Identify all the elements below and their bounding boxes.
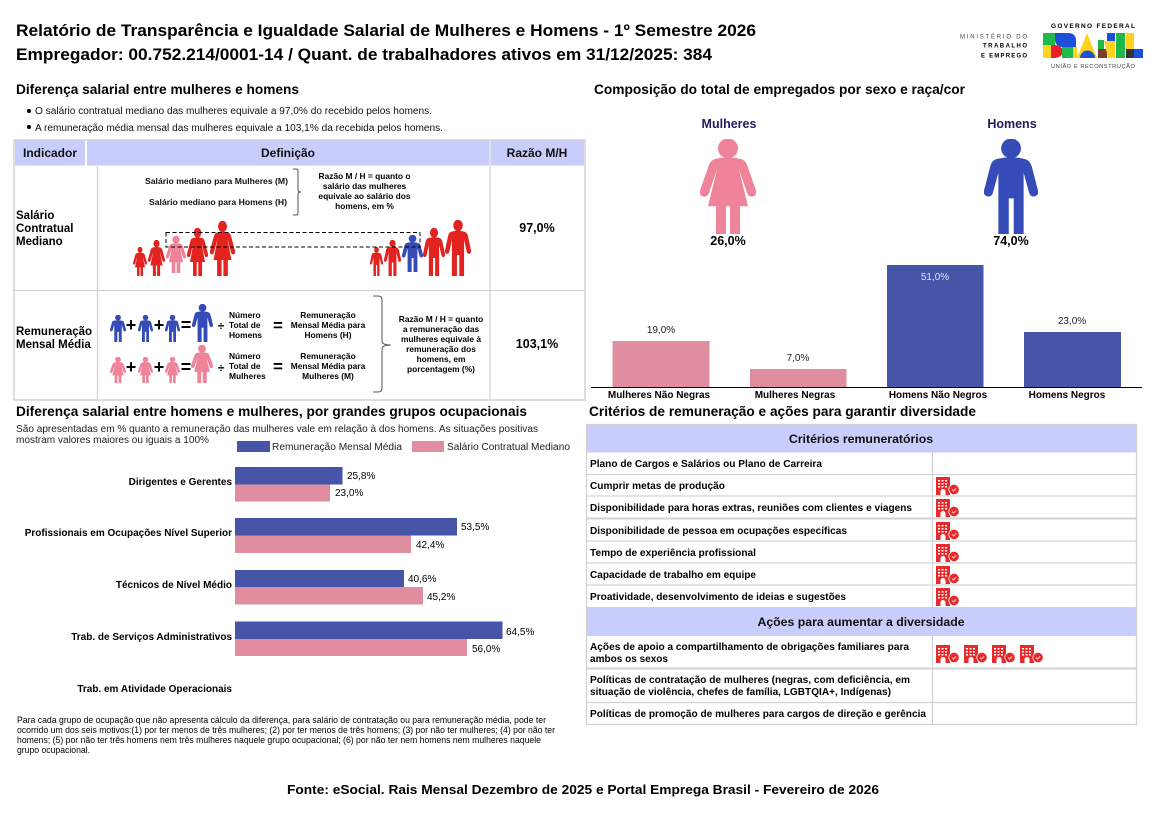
definition: remuneração média, mulheres: = [181,357,191,377]
legend: Remuneração Mensal Média [272,442,403,453]
row label: Salário Contratual Mediano [16,210,74,248]
figure: mulheres 26,0%: 26,0% [710,234,746,248]
definition: remuneração média, homens: Total de [229,320,261,330]
footnote: grupo ocupacional. [17,745,90,755]
heading: composição: Composição do total de empregados por sexo e raça/cor [594,82,966,97]
row labels: Ações de apoio a compartilhamento de obrigações familiares para [590,642,910,653]
bar chart: grupos ocupacionais: 64,5% [506,627,534,638]
bar chart: composição por raça/cor: 51,0% [921,272,949,283]
footnote: Para cada grupo de ocupação que não apresenta cálculo da diferença, para salário de contratação ou para remuneração média, pode ter [17,715,546,725]
icons: empresas com critério [936,477,1043,663]
bullet list: O salário contratual mediano das mulheres equivale a 97,0% do recebido pelos homens. [35,106,432,117]
definition: remuneração média, homens: + [154,315,164,335]
subtitle [16,424,538,446]
mediana destacada [166,232,420,247]
bar chart: grupos ocupacionais: 45,2% [427,592,455,603]
source: Fonte: eSocial. Rais Mensal Dezembro de 2025 e Portal Emprega Brasil - Fevereiro de 2026 [287,783,879,797]
bar chart: composição por raça/cor: Mulheres Não Negras [608,390,711,401]
logo: Ministério do Trabalho e Emprego: E EMPREGO [981,54,1027,60]
panel: critérios de remuneração [586,424,1136,725]
figure: homens 74,0% [984,117,1038,248]
footnote: homens; (5) por não ter três homens nem três mulheres naquele grupo ocupacional; (6) por não ter nem homens nem mulheres naquele [17,735,541,745]
bracket and explanation: porcentagem (%) [407,364,475,374]
legend [237,441,571,453]
row labels: Políticas de promoção de mulheres para cargos de direção e gerência [590,709,927,720]
row labels: Proatividade, desenvolvimento de ideias e sugestões [590,592,847,603]
table headers: Razão M/H [507,146,567,160]
row labels: Disponibilidade de pessoa em ocupações específicas [590,526,848,537]
bar chart: grupos ocupacionais: 56,0% [472,644,500,655]
logo: Governo Federal Brasil: GOVERNO FEDERAL [1051,23,1135,30]
bar chart: composição por raça/cor: Homens Não Negros [889,390,988,401]
logo: Ministério do Trabalho e Emprego: MINISTÉRIO DO [960,34,1027,40]
definition: remuneração média, homens: Homens [229,330,262,340]
bracket and explanation: Razão M / H = quanto [399,314,483,324]
bar chart: composição por raça/cor: Mulheres Negras [755,390,836,401]
bullet list [27,106,443,134]
header: ações: Ações para aumentar a diversidade [757,615,965,629]
definition: remuneração média, mulheres: = [273,357,283,376]
bracket and explanation: homens, em [417,354,465,364]
bar chart: grupos ocupacionais: Técnicos de Nível Médio [116,580,232,591]
icons: mulheres em fila [133,221,235,276]
logo: Ministério do Trabalho e Emprego [960,34,1027,60]
row labels: Cumprir metas de produção [590,481,725,492]
definition: salário mediano: salário das mulheres [323,181,407,191]
definition: remuneração média, mulheres [110,345,366,383]
footnote [17,715,555,755]
table headers [23,146,567,160]
definition: remuneração média, homens: = [181,315,191,335]
bar chart: composição por raça/cor: 7,0% [787,353,810,364]
bar chart: composição por raça/cor: 23,0% [1058,316,1086,327]
bullet list: A remuneração média mensal das mulheres equivale a 103,1% da recebida pelos homens. [35,123,443,134]
definition: remuneração média, mulheres: ÷ [218,361,225,375]
bracket and explanation: a remuneração das [403,324,480,334]
heading: diferença por grupos: Diferença salarial entre homens e mulheres, por grandes grupos ocupacionais [16,404,527,419]
definition: remuneração média, homens: ÷ [218,319,225,333]
bar chart: grupos ocupacionais: 40,6% [408,574,436,585]
row label: Remuneração Mensal Média: Mensal Média [16,339,91,351]
icons: homens em fila [370,220,471,276]
definition: remuneração média, mulheres: Mensal Média para [291,361,366,371]
row labels [590,459,927,720]
heading: diferença salarial: Diferença salarial entre mulheres e homens [16,82,299,97]
definition: remuneração média, homens: Homens (H) [304,330,352,340]
title: Relatório de Transparência e Igualdade Salarial de Mulheres e Homens - 1º Semestre 2026 [16,22,756,40]
bar chart: composição por raça/cor: Homens Negros [1029,390,1106,401]
title [16,22,756,64]
subtitle: São apresentadas em % quanto a remuneração das mulheres vale em relação à dos homens. As situações positivas [16,424,538,435]
row label: Salário Contratual Mediano: Mediano [16,236,63,248]
definition: salário mediano: homens, em % [335,201,394,211]
logo: Governo Federal Brasil: UNIÃO E RECONSTRUÇÃO [1051,63,1135,70]
logo: Governo Federal Brasil [1043,23,1143,70]
table headers: Definição [261,146,315,160]
figure: homens 74,0%: Homens [987,117,1037,131]
row label: Salário Contratual Mediano: Salário [16,210,54,222]
bar chart: grupos ocupacionais: 53,5% [461,522,489,533]
definition: salário mediano: Salário mediano para Mulheres (M) [145,176,288,186]
bar chart: grupos ocupacionais: 25,8% [347,471,375,482]
row label: Remuneração Mensal Média: Remuneração [16,326,92,338]
bar chart: grupos ocupacionais: 23,0% [335,488,363,499]
row labels: Políticas de contratação de mulheres (negras, com deficiência, em [590,675,910,686]
bracket and explanation: mulheres equivale à [401,334,481,344]
definition: remuneração média, mulheres: Remuneração [300,351,356,361]
bar chart: grupos ocupacionais: Trab. em Atividade Operacionais [77,684,232,695]
definition: remuneração média, mulheres: Mulheres (M) [302,371,354,381]
bar chart: grupos ocupacionais: Profissionais em Ocupações Nível Superior [25,528,232,539]
definition: remuneração média, homens: Remuneração [300,310,356,320]
definition: remuneração média, mulheres: + [154,357,164,377]
subtitle: mostram valores maiores ou iguais a 100% [16,435,209,446]
figure: homens 74,0%: 74,0% [993,234,1029,248]
bar chart: grupos ocupacionais: 42,4% [416,540,444,551]
table headers: Indicador [23,146,77,160]
logo: Ministério do Trabalho e Emprego: TRABALHO [983,44,1027,50]
definition: remuneração média, homens: = [273,316,283,335]
title: Empregador: 00.752.214/0001-14 / Quant. de trabalhadores ativos em 31/12/2025: 384 [16,46,713,64]
bar chart: composição por raça/cor: 19,0% [647,325,675,336]
definition: remuneração média, mulheres: Número [229,351,261,361]
heading: critérios: Critérios de remuneração e ações para garantir diversidade [589,404,976,419]
bracket and explanation: remuneração dos [406,344,476,354]
bar chart: grupos ocupacionais: Dirigentes e Gerentes [129,477,232,488]
panel: tabela de indicadores [14,140,585,400]
header: critérios remuneratórios: Critérios remuneratórios [789,432,933,446]
definition: remuneração média, homens: Número [229,310,261,320]
row labels: Plano de Cargos e Salários ou Plano de Carreira [590,459,823,470]
definition: remuneração média, mulheres: Total de [229,361,261,371]
bar chart: grupos ocupacionais: Trab. de Serviços Administrativos [71,632,232,643]
bracket and explanation [373,296,483,392]
footnote: ocorrido um dos seis motivos:(1) por ter menos de três mulheres; (2) por ter menos de três homens; (3) por não ter mulheres; (4) por não ter [17,725,555,735]
definition: remuneração média, mulheres: Mulheres [229,371,266,381]
row label: Remuneração Mensal Média [16,326,92,351]
row labels: situação de violência, chefes de família, LGBTQIA+, Indígenas) [590,687,891,698]
bar chart: composição por raça/cor [591,265,1142,401]
legend: Salário Contratual Mediano [447,442,571,453]
row labels: Tempo de experiência profissional [590,548,756,559]
definition: remuneração média, homens: + [126,315,136,335]
definition: salário mediano: Razão M / H = quanto o [319,171,410,181]
definition: remuneração média, homens [110,304,366,342]
row label: Salário Contratual Mediano: Contratual [16,223,74,235]
value: 97,0%: 97,0% [519,221,555,235]
figure: mulheres 26,0%: Mulheres [702,117,756,131]
definition: remuneração média, homens: Mensal Média para [291,320,366,330]
row labels: Capacidade de trabalho em equipe [590,570,757,581]
row labels: Disponibilidade para horas extras, reuniões com clientes e viagens [590,503,913,514]
definition: salário mediano: equivale ao salário dos [318,191,411,201]
figure: mulheres 26,0% [700,117,756,248]
definition: remuneração média, mulheres: + [126,357,136,377]
value: 103,1%: 103,1% [516,337,558,351]
bar chart: grupos ocupacionais [25,467,534,695]
definition: salário mediano [145,169,411,215]
definition: salário mediano: Salário mediano para Homens (H) [149,197,287,207]
row labels: ambos os sexos [590,654,669,665]
